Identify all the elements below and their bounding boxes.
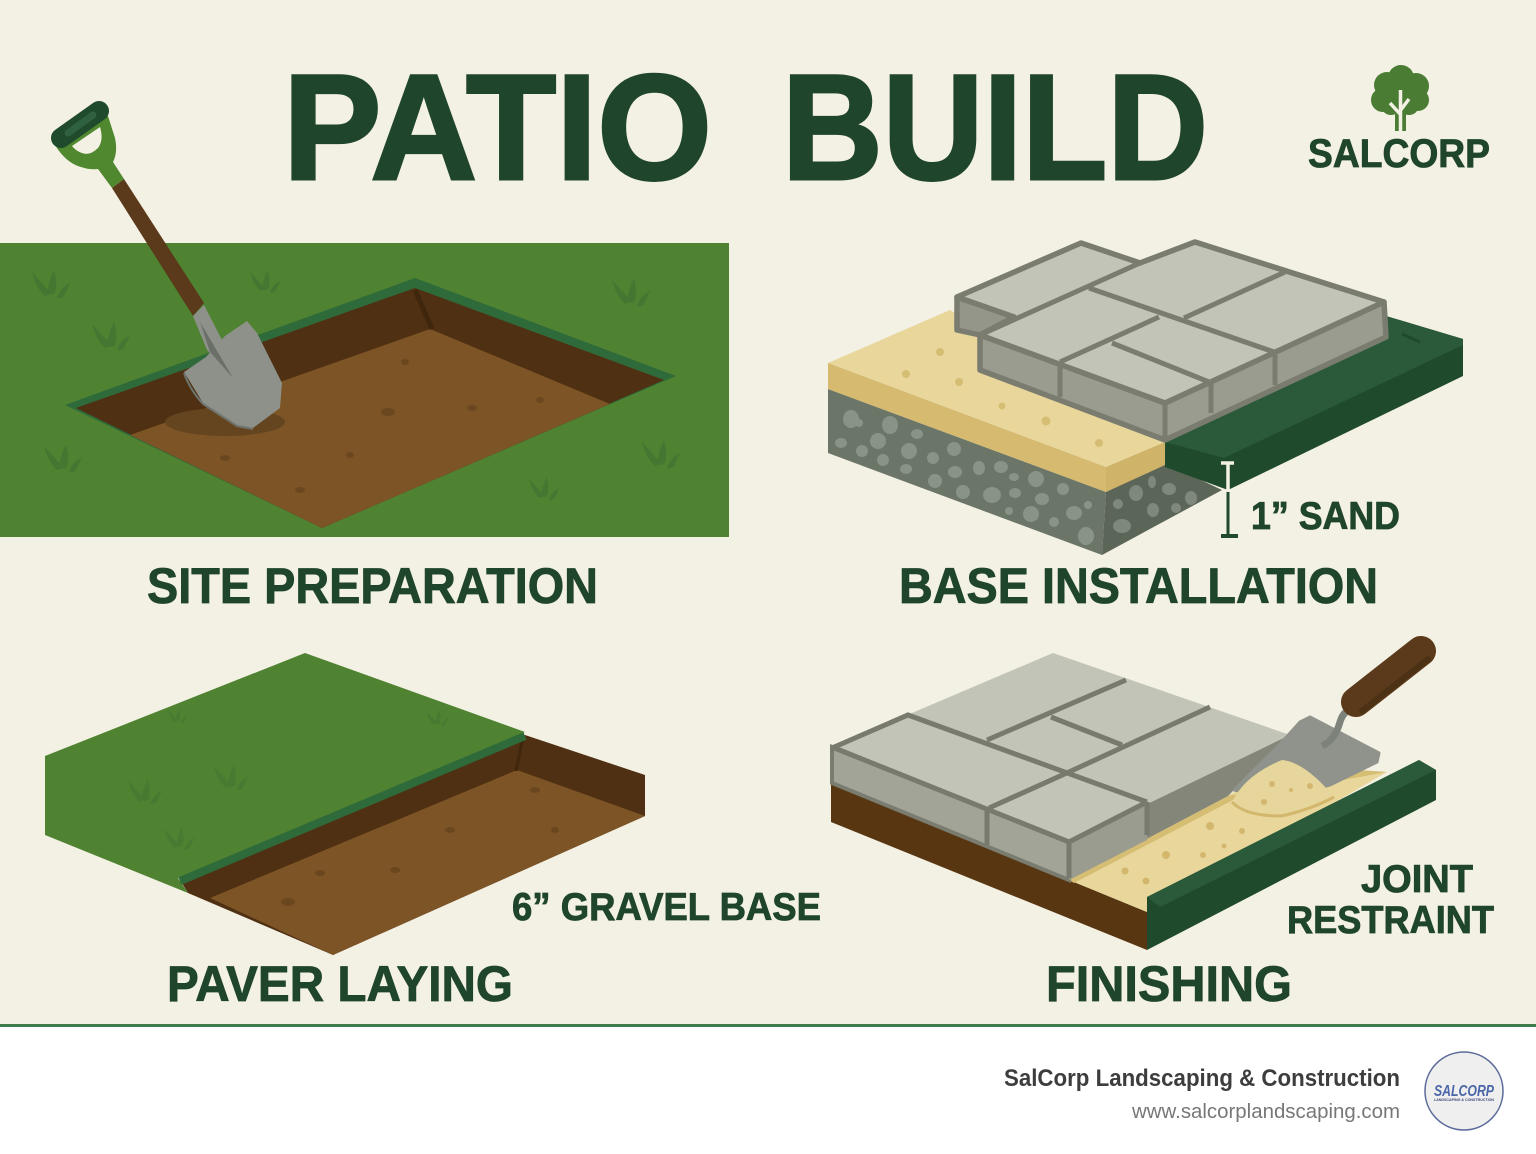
excavated pit [65, 278, 676, 528]
badge logo: SALCORP [1434, 1083, 1494, 1100]
title: BUILD [782, 43, 1208, 211]
icon: trowel with sand pile [1232, 651, 1428, 816]
trench brown [180, 735, 645, 955]
badge logo: LANDSCAPING & CONSTRUCTION [1434, 1098, 1494, 1102]
company name: SalCorp Landscaping & Construction [1004, 1065, 1400, 1092]
paver top faces [957, 242, 1384, 403]
heading: finishing: FINISHING [1046, 956, 1292, 1012]
title: PATIO [283, 43, 712, 211]
pavers [957, 242, 1386, 440]
panel: site preparation [0, 111, 729, 537]
label: joint restraint [1287, 858, 1494, 942]
label: 1 inch sand: 1” SAND [1251, 495, 1400, 538]
edge restraint [1165, 316, 1463, 490]
lawn [45, 653, 525, 893]
label: gravel base: 6” GRAVEL BASE [512, 886, 821, 929]
heading: site preparation: SITE PREPARATION [147, 558, 598, 614]
paver side faces [957, 297, 1014, 335]
soil base [831, 783, 1147, 950]
dimension marker [1221, 463, 1238, 536]
panel: paver laying [45, 653, 821, 955]
grass tufts [128, 709, 449, 850]
heading: base installation: BASE INSTALLATION [899, 558, 1378, 614]
icon: shovel [55, 111, 282, 429]
sand layer [828, 310, 1165, 492]
footer [0, 1024, 1536, 1154]
label: joint restraint: RESTRAINT [1287, 899, 1494, 942]
wordmark: SALCORP [1308, 132, 1490, 176]
grass tufts [32, 270, 680, 500]
badge logo [1425, 1052, 1503, 1130]
edge restraint [1147, 760, 1436, 950]
logo: SalCorp tree and wordmark [1308, 65, 1490, 176]
heading: paver laying: PAVER LAYING [167, 956, 513, 1012]
pavers [832, 653, 1290, 880]
sand bed [1069, 765, 1387, 912]
label: joint restraint: JOINT [1361, 858, 1473, 901]
icon: tree [1371, 65, 1429, 131]
title [283, 43, 1208, 211]
lawn [0, 243, 729, 537]
website: www.salcorplandscaping.com [1131, 1100, 1400, 1123]
gravel layer [828, 389, 1222, 555]
panel: finishing [831, 651, 1494, 950]
panel: base installation [828, 242, 1463, 555]
